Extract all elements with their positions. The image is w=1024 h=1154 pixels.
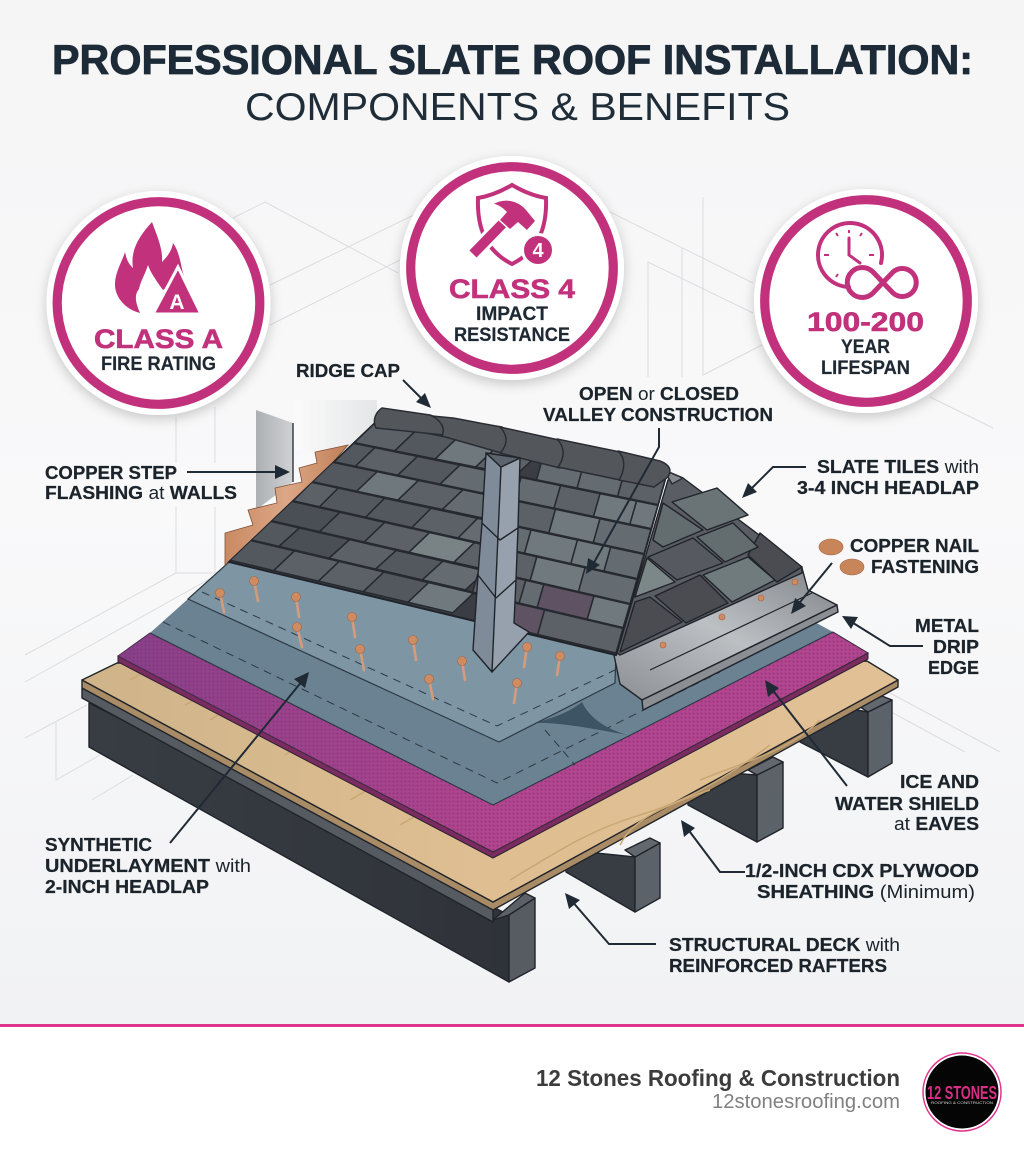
label: valley construction — [543, 383, 773, 425]
label: slate tiles: 3-4 INCH HEADLAP — [797, 477, 979, 498]
label: synthetic underlayment: 2-INCH HEADLAP — [45, 876, 209, 897]
badge caption: YEAR — [841, 337, 890, 358]
label: plywood sheathing: 1/2-INCH CDX PLYWOOD — [745, 860, 979, 881]
icon: clock — [818, 223, 882, 287]
footer — [0, 1024, 1024, 1154]
icon: copper coins — [819, 539, 864, 575]
label: structural deck: REINFORCED RAFTERS — [669, 955, 887, 976]
label: copper step flashing: FLASHING at WALLS — [45, 482, 237, 503]
icon: number 4 circle — [522, 234, 554, 266]
label: ice and water shield: at EAVES — [894, 813, 979, 834]
arrow: copper step flashing — [187, 465, 290, 479]
label: synthetic underlayment: SYNTHETIC — [45, 834, 152, 855]
badge: 100-200 year lifespan: LIFESPAN — [821, 358, 910, 379]
icon: hammer — [473, 200, 536, 254]
label: copper step flashing — [45, 462, 237, 503]
copper nails — [216, 576, 564, 703]
label: structural deck: STRUCTURAL DECK with — [669, 934, 900, 955]
badge: class 4 impact resistance — [400, 156, 624, 380]
slate roof hip side — [617, 478, 802, 655]
arrow: slate tiles — [742, 467, 806, 498]
label: ice and water shield: WATER SHIELD — [835, 793, 979, 814]
metal drip edge — [614, 568, 838, 710]
label: ridge cap: RIDGE CAP — [296, 360, 400, 381]
ridge cap — [374, 408, 683, 487]
icon: number 4 circle: 4 — [532, 240, 544, 262]
label: copper nail fastening: FASTENING — [871, 556, 979, 577]
slate roof main slope — [229, 423, 665, 655]
badge: class A fire rating — [46, 191, 270, 415]
badge: 100-200 year lifespan — [754, 189, 978, 413]
icon: infinity — [847, 268, 916, 298]
arrow: ridge cap — [403, 380, 431, 408]
icon: shield — [478, 185, 546, 264]
badge: class 4 impact resistance: RESISTANCE — [454, 325, 570, 346]
rafter 3 — [688, 757, 783, 842]
label: metal drip edge — [915, 615, 979, 678]
copper nails on drip edge — [660, 579, 798, 648]
arrow: structural deck — [565, 893, 656, 944]
left slates — [356, 424, 532, 472]
arrow: copper nail — [791, 563, 832, 614]
logo — [923, 1053, 1001, 1131]
label: structural deck — [669, 934, 900, 976]
synthetic underlayment — [150, 560, 833, 805]
label: slate tiles — [797, 456, 979, 498]
label: valley construction: OPEN or CLOSED — [579, 383, 739, 404]
label: valley construction: VALLEY CONSTRUCTION — [543, 404, 773, 425]
arrow: ice and water shield — [765, 680, 847, 786]
icon: triangle A — [153, 267, 201, 314]
icon: triangle A: A — [169, 291, 185, 314]
wall background — [293, 400, 377, 450]
label: copper nail fastening — [819, 535, 979, 577]
label: synthetic underlayment — [45, 834, 251, 897]
copper step flashing — [225, 445, 348, 565]
structural deck front beam — [82, 688, 535, 982]
label: synthetic underlayment: UNDERLAYMENT with — [45, 855, 251, 876]
upper underlayment sheet — [188, 562, 616, 742]
badge heading: CLASS A — [94, 324, 223, 354]
arrow: valley — [586, 428, 659, 574]
logo: ROOFING & CONSTRUCTION — [931, 1100, 993, 1105]
arrow: metal drip edge — [842, 616, 923, 646]
right slates — [536, 464, 665, 504]
title line 1: PROFESSIONAL SLATE ROOF INSTALLATION: — [52, 36, 973, 83]
company website: 12stonesroofing.com — [712, 1091, 900, 1113]
ice and water shield — [118, 632, 868, 858]
underlayment dashed seam — [163, 622, 720, 783]
badge heading: CLASS 4 — [449, 274, 575, 304]
label: ice and water shield: ICE AND — [900, 771, 979, 792]
icon: flame — [115, 222, 184, 313]
label: plywood sheathing — [745, 860, 979, 902]
title — [52, 36, 973, 129]
plywood sheathing — [82, 660, 898, 910]
valley metal — [473, 453, 529, 672]
arrow: synthetic underlayment — [170, 672, 309, 843]
arrow: plywood — [681, 820, 745, 872]
label: slate tiles: SLATE TILES with — [817, 456, 979, 477]
label: metal drip edge: EDGE — [928, 657, 979, 678]
rafter 2 — [566, 838, 660, 912]
badge caption: IMPACT — [476, 304, 548, 325]
company name: 12 Stones Roofing & Construction — [536, 1065, 900, 1091]
label: copper nail fastening: COPPER NAIL — [850, 535, 979, 556]
badge caption: FIRE RATING — [101, 354, 216, 375]
label: metal drip edge: DRIP — [933, 636, 979, 657]
label: metal drip edge: METAL — [915, 615, 979, 636]
label: ice and water shield — [835, 771, 979, 834]
label: copper step flashing: COPPER STEP — [45, 462, 177, 483]
underlayment curled corner — [535, 702, 627, 735]
wall flashing panel — [256, 410, 293, 510]
logo: 12 STONES — [927, 1083, 997, 1103]
rafter 4 — [800, 696, 892, 777]
label: plywood sheathing: SHEATHING (Minimum) — [757, 881, 975, 902]
title line 2: COMPONENTS & BENEFITS — [245, 86, 790, 129]
roof cross-section illustration — [82, 400, 898, 982]
badge heading: 100-200 — [807, 307, 924, 337]
